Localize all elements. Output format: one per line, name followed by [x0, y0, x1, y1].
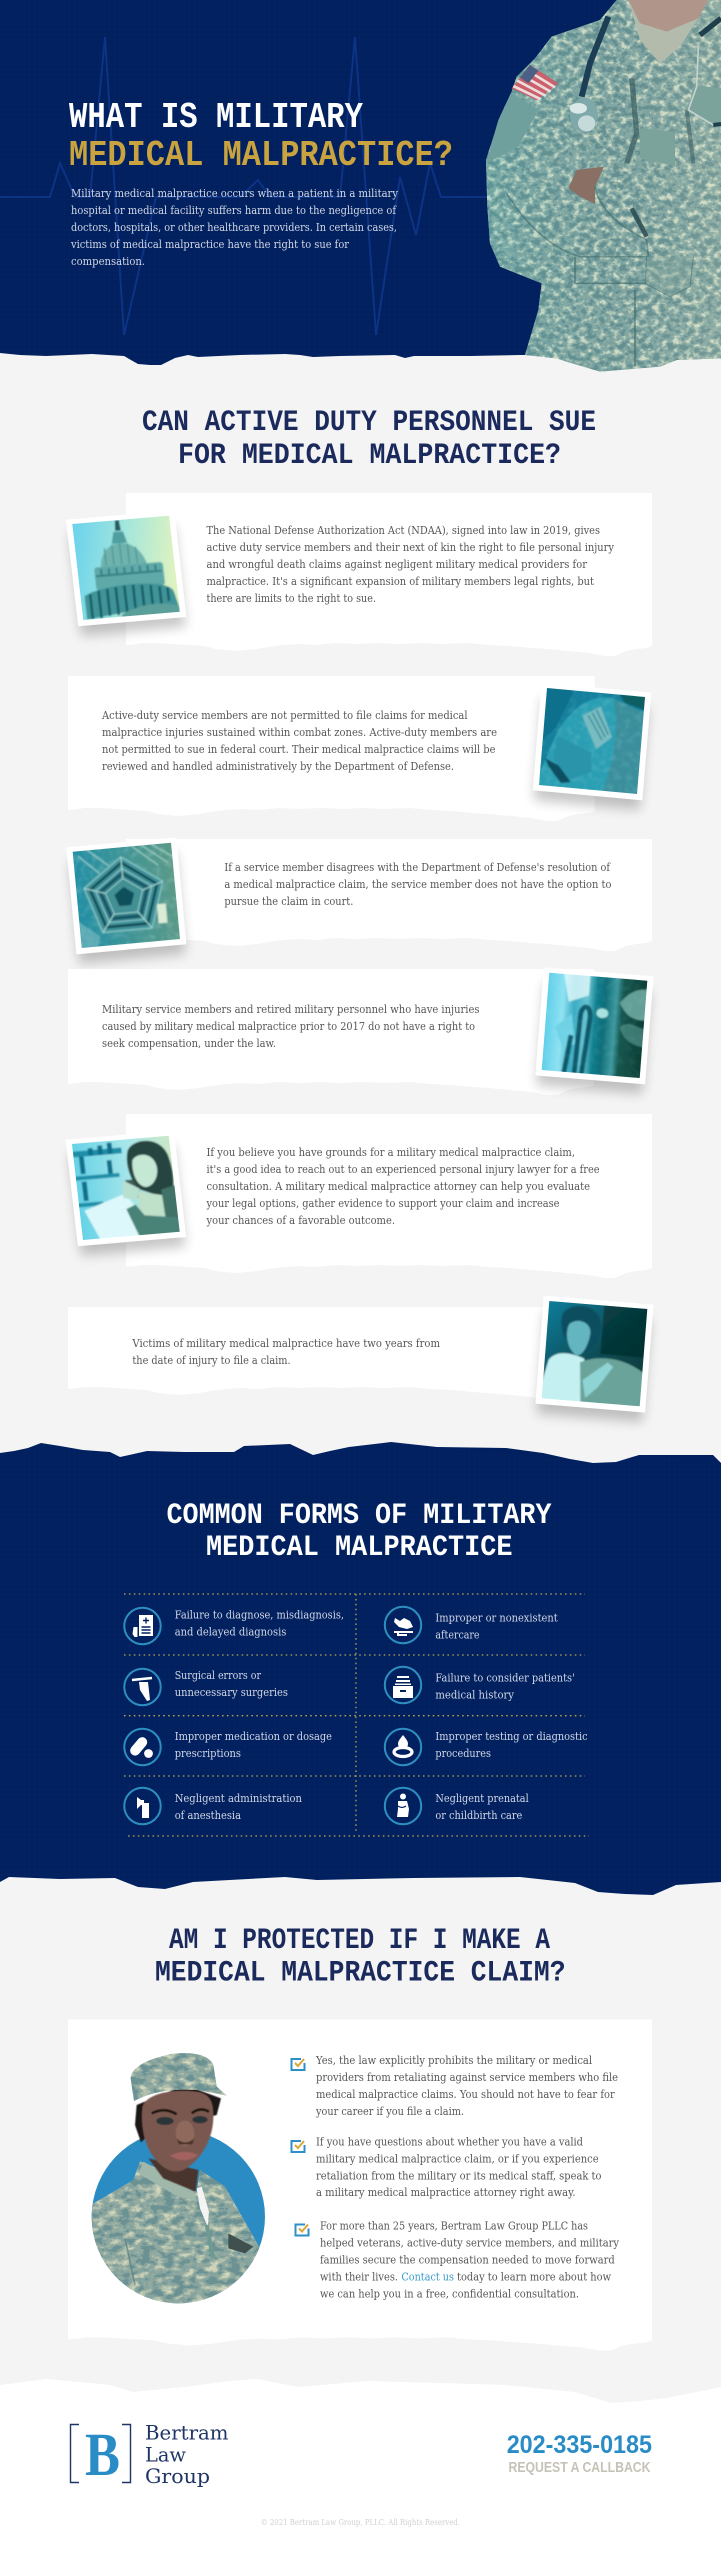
footer: [0, 2379, 721, 2560]
list text: Bertram Law Group: families secure the compensation needed to move forward: [320, 2253, 615, 2266]
card text: The National Defense Authorization Act (NDAA), signed into law in 2019, gives: [206, 524, 600, 537]
list text: Bertram Law Group: [320, 2220, 620, 2300]
heading: am I protected: [155, 1924, 566, 1990]
item: improper medication: prescriptions: [175, 1747, 241, 1760]
heading: can active duty personnel sue: [142, 406, 596, 473]
card text: malpractice injuries sustained within combat zones. Active-duty members are: [102, 726, 497, 739]
photo: capitol dome: [66, 509, 188, 636]
card text: If a service member disagrees with the Department of Defense's resolution of: [224, 861, 611, 874]
panel: free consultation card: [66, 1114, 652, 1278]
card text: [206, 524, 615, 605]
hero title: [69, 97, 453, 176]
card text: and wrongful death claims against negligent military medical providers for: [206, 558, 588, 571]
soldier photo: [486, 0, 721, 372]
card text: consultation. A military medical malpractice attorney can help you evaluate: [206, 1180, 590, 1193]
card text: your legal options, gather evidence to support your claim and increase: [206, 1197, 560, 1210]
card text: not permitted to sue in federal court. Their medical malpractice claims will be: [102, 743, 496, 756]
hero title: MEDICAL MALPRACTICE?: [69, 135, 453, 176]
heading: common forms: [166, 1499, 552, 1565]
list text: retaliation prohibited: medical malpractice claims. You should not have to fear for: [316, 2088, 615, 2101]
panel: combat zones card: [68, 676, 651, 821]
heading: can active duty personnel sue: FOR MEDICAL MALPRACTICE?: [178, 439, 561, 473]
checkbox: [292, 2141, 304, 2152]
card text: pursue the claim in court.: [224, 895, 353, 908]
card text: caused by military medical malpractice prior to 2017 do not have a right to: [102, 1020, 475, 1033]
item: improper testing: Improper testing or diagnostic: [435, 1730, 588, 1743]
hero intro text: Military medical malpractice occurs when a patient in a military: [71, 187, 399, 200]
photo: woman on phone: [66, 1129, 187, 1256]
card text: [102, 1003, 480, 1050]
card text: your chances of a favorable outcome.: [206, 1214, 395, 1227]
item: aftercare: Improper or nonexistent: [435, 1611, 558, 1624]
list text: speak to attorney: retaliation from the military or its medical staff, speak to: [316, 2169, 602, 2182]
list text: retaliation prohibited: [315, 2054, 618, 2118]
item: medical history: Failure to consider patients': [435, 1671, 575, 1684]
card text: [224, 861, 612, 908]
heading: can active duty personnel sue: CAN ACTIVE DUTY PERSONNEL SUE: [142, 406, 596, 440]
card text: a medical malpractice claim, the service member does not have the option to: [224, 878, 612, 891]
item: surgical errors: unnecessary surgeries: [175, 1686, 288, 1699]
list text: retaliation prohibited: your career if you file a claim.: [315, 2105, 464, 2118]
list text: retaliation prohibited: providers from retaliating against service members who file: [316, 2071, 618, 2084]
list text: speak to attorney: If you have questions about whether you have a valid: [316, 2136, 583, 2148]
item: prenatal care: [385, 1788, 529, 1824]
panel: department of defense card: [66, 836, 652, 964]
card text: the date of injury to file a claim.: [132, 1354, 291, 1367]
card text: Victims of military medical malpractice have two years from: [131, 1337, 441, 1350]
item: failure to diagnose: Failure to diagnose, misdiagnosis,: [175, 1609, 344, 1622]
card text: reviewed and handled administratively by the Department of Defense.: [102, 760, 454, 773]
heading: am I protected: MEDICAL MALPRACTICE CLAIM?: [155, 1956, 566, 1990]
hero intro text: doctors, hospitals, or other healthcare providers. In certain cases,: [71, 221, 397, 234]
list text: Bertram Law Group: helped veterans, active-duty service members, and military: [320, 2236, 620, 2250]
panel: protection card: [68, 2020, 652, 2350]
card text: seek compensation, under the law.: [102, 1037, 276, 1050]
item: failure to diagnose: [124, 1608, 344, 1644]
item: failure to diagnose: and delayed diagnosis: [175, 1626, 287, 1639]
photo: two women embracing: [535, 1295, 654, 1422]
panel: NDAA card: [66, 493, 652, 656]
heading: am I protected: AM I PROTECTED IF I MAKE A: [169, 1924, 550, 1958]
ECG line: [0, 37, 490, 335]
item: surgical errors: [124, 1669, 288, 1705]
item: prenatal care: Negligent prenatal: [435, 1792, 529, 1805]
checkbox: [296, 2224, 308, 2236]
panel: prior to 2017 card: [68, 966, 654, 1095]
item: anesthesia: of anesthesia: [175, 1809, 241, 1822]
card text: active duty service members and their next of kin the right to file personal injury: [206, 541, 615, 554]
callback label: REQUEST A CALLBACK: [508, 2460, 651, 2476]
item: improper testing: [385, 1729, 588, 1765]
hero intro text: compensation.: [71, 255, 145, 268]
panel: common forms: [0, 1442, 721, 1895]
logo: Group: [145, 2465, 210, 2488]
logo: Law: [145, 2444, 186, 2466]
card text: [206, 1146, 600, 1227]
list text: Bertram Law Group: with their lives.: [320, 2270, 398, 2283]
list text: speak to attorney: military medical malpractice claim, or if you experience: [316, 2152, 599, 2165]
item: improper testing: procedures: [435, 1747, 491, 1760]
photo: uniform shoulder patch: [532, 682, 651, 810]
photo: hand and stethoscope: [535, 966, 654, 1094]
list text: Bertram Law Group: today to learn more about how: [457, 2270, 612, 2283]
card text: [101, 709, 497, 773]
logo: B: [85, 2422, 120, 2489]
card text: Active-duty service members are not permitted to file claims for medical: [101, 709, 468, 722]
list text: Bertram Law Group: Contact us: [401, 2270, 454, 2283]
panel: hero: [0, 0, 721, 372]
card text: [131, 1337, 441, 1367]
item: improper medication: Improper medication or dosage: [175, 1730, 332, 1743]
hero intro text: hospital or medical facility suffers harm due to the negligence of: [71, 204, 397, 217]
card text: it's a good idea to reach out to an experienced personal injury lawyer for a free: [206, 1163, 600, 1176]
copyright: © 2021 Bertram Law Group, PLLC. All Rights Reserved.: [261, 2518, 460, 2527]
phone number: 202-335-0185: [507, 2431, 652, 2459]
heading: common forms: COMMON FORMS OF MILITARY: [166, 1499, 552, 1533]
item: anesthesia: [124, 1788, 302, 1824]
hero title: WHAT IS MILITARY: [69, 97, 363, 138]
item: aftercare: [385, 1607, 558, 1643]
card text: Military service members and retired military personnel who have injuries: [102, 1003, 480, 1016]
item: prenatal care: or childbirth care: [435, 1809, 522, 1822]
checkbox: [292, 2059, 304, 2070]
photo: pentagon aerial: [66, 836, 187, 964]
list text: retaliation prohibited: Yes, the law explicitly prohibits the military or medical: [315, 2054, 592, 2067]
portrait: female soldier on blue circle: [92, 2053, 265, 2304]
item: medical history: [385, 1667, 575, 1703]
panel: two years card: [68, 1295, 654, 1422]
list text: Bertram Law Group: For more than 25 years, Bertram Law Group PLLC has: [320, 2220, 588, 2233]
list text: speak to attorney: [316, 2136, 602, 2199]
item: medical history: medical history: [435, 1688, 515, 1701]
item: improper medication: [124, 1729, 332, 1765]
hero intro text: [70, 187, 399, 268]
card text: there are limits to the right to sue.: [206, 592, 376, 605]
hero intro text: victims of medical malpractice have the right to sue for: [70, 238, 350, 251]
card text: If you believe you have grounds for a military medical malpractice claim,: [206, 1146, 575, 1159]
list text: Bertram Law Group: we can help you in a free, confidential consultation.: [320, 2287, 579, 2300]
logo: Bertram: [145, 2422, 228, 2444]
item: anesthesia: Negligent administration: [175, 1792, 302, 1805]
logo: [70, 2422, 228, 2489]
heading: common forms: MEDICAL MALPRACTICE: [206, 1531, 512, 1565]
card text: malpractice. It's a significant expansion of military members legal rights, but: [206, 575, 595, 588]
item: aftercare: aftercare: [435, 1628, 480, 1641]
item: surgical errors: Surgical errors or: [175, 1669, 262, 1682]
list text: speak to attorney: a military medical malpractice attorney right away.: [316, 2186, 576, 2199]
